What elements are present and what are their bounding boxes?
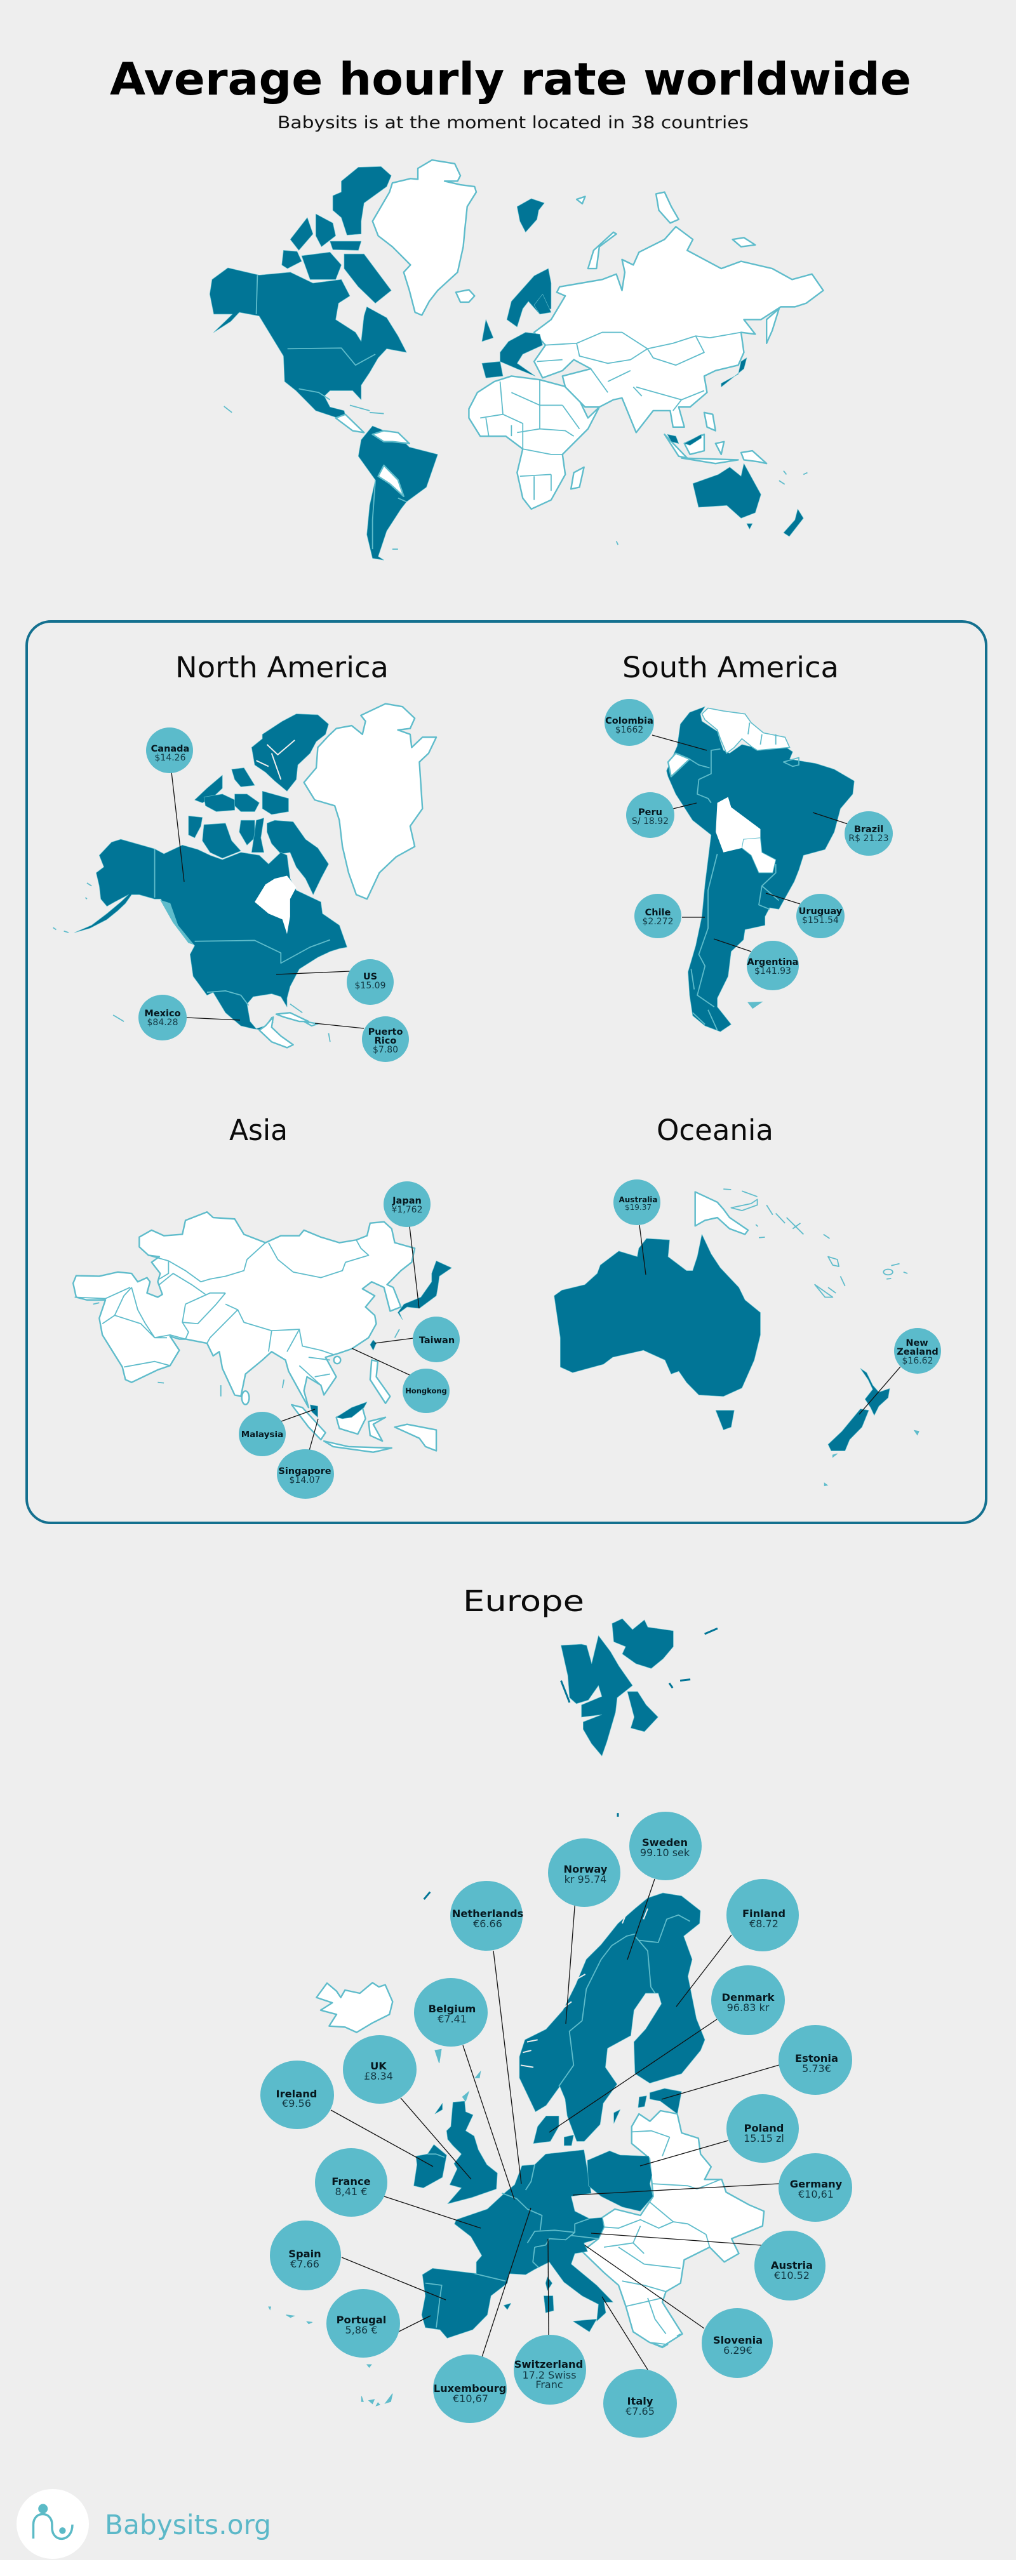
callout: Belgium: Belgium (429, 2003, 476, 2015)
callout: Brazil (813, 811, 893, 856)
map: North America (53, 704, 436, 1047)
callout: UK: £8.34 (364, 2070, 393, 2082)
callout: Puerto Rico: Puerto (368, 1027, 403, 1037)
callout: Austria (591, 2231, 826, 2300)
callout: Finland: €8.72 (749, 1918, 779, 1930)
callout: Mexico: Mexico (144, 1009, 181, 1019)
panel: Europe (260, 1584, 852, 2438)
callout: New Zealand: $16.62 (902, 1356, 933, 1366)
callout: Sweden: 99.10 sek (640, 1847, 690, 1859)
callout: Peru (626, 792, 697, 838)
callout: Austria: €10.52 (774, 2269, 810, 2281)
map: Europe north-west (316, 1982, 497, 2204)
map: South America (667, 707, 854, 1032)
callout: Hongkong: Hongkong (405, 1386, 447, 1395)
callout: Chile (634, 894, 705, 938)
panel: North America (53, 651, 436, 1062)
callout: US: US (363, 972, 377, 982)
title: Average hourly rate worldwide (110, 53, 911, 105)
heading: North America: North America (175, 651, 389, 684)
callout: Estonia: Estonia (795, 2052, 838, 2064)
footer brand name: Babysits.org (105, 2509, 271, 2541)
callout: Austria: Austria (771, 2259, 813, 2271)
callout: Germany: Germany (790, 2178, 843, 2190)
callout: Taiwan (375, 1317, 460, 1362)
footer logo (17, 2489, 89, 2559)
callout: Slovenia: Slovenia (713, 2334, 763, 2346)
logo badge (17, 2489, 89, 2559)
callout: New Zealand: Zealand (897, 1347, 939, 1357)
callout: Germany (573, 2153, 852, 2222)
callout: Puerto Rico: Rico (375, 1036, 396, 1046)
callout: US (276, 959, 394, 1005)
callout: Switzerland (514, 2239, 586, 2405)
callout: France (315, 2148, 481, 2228)
map: Asia (73, 1212, 451, 1452)
callout: Argentina: Argentina (747, 957, 798, 967)
callout: Argentina: $141.93 (754, 966, 791, 976)
callout: France: France (331, 2175, 371, 2188)
callout: Australia: Australia (618, 1195, 658, 1204)
callout: Brazil: Brazil (854, 825, 883, 835)
heading: Oceania: Oceania (657, 1113, 773, 1147)
callout: Puerto Rico: $7.80 (373, 1045, 398, 1055)
callout: Netherlands: Netherlands (452, 1908, 523, 1920)
map: Europe south and centre (269, 2111, 764, 2406)
callout: Sweden: Sweden (642, 1836, 688, 1849)
heading: Asia: Asia (229, 1113, 288, 1147)
callout: Germany: €10,61 (798, 2188, 834, 2200)
callout: Singapore (277, 1419, 334, 1499)
callout: Hongkong (352, 1348, 450, 1413)
callout: Peru: Peru (638, 807, 662, 818)
heading: South America: South America (622, 651, 839, 684)
callout: Malaysia (239, 1409, 315, 1456)
logo figure line (33, 2514, 72, 2539)
callout: UK: UK (370, 2060, 387, 2072)
callout: Poland: 15.15 zl (744, 2132, 784, 2144)
callout: Estonia (662, 2025, 852, 2099)
callout: Switzerland: Franc (535, 2379, 563, 2391)
callout: Poland: Poland (744, 2122, 784, 2134)
callout: Mexico (138, 995, 240, 1040)
callout: Norway: Norway (564, 1863, 608, 1875)
callout: Japan (384, 1181, 431, 1308)
map: Svalbard (424, 1619, 718, 1899)
callout: Canada (146, 727, 193, 882)
callout: New Zealand: New (906, 1338, 928, 1348)
callout: Spain (270, 2221, 446, 2300)
callout: Ireland (260, 2061, 433, 2167)
callout: Portugal (326, 2289, 431, 2358)
callout: Switzerland: 17.2 Swiss (522, 2369, 577, 2381)
callout: Luxembourg (433, 2208, 531, 2423)
callout: Spain: Spain (288, 2248, 321, 2260)
panel: continents frame (27, 621, 986, 1523)
callout: Italy: €7.65 (625, 2405, 655, 2417)
logo child head (59, 2527, 66, 2534)
callout: Chile: Chile (645, 908, 671, 918)
callout: Singapore: Singapore (278, 1466, 331, 1477)
callout: Canada: $14.26 (155, 753, 186, 763)
callout: Netherlands: €6.66 (473, 1918, 502, 1930)
map: Oceania (554, 1189, 919, 1486)
callout: Spain: €7.66 (290, 2258, 319, 2270)
heading: Europe: Europe (463, 1584, 584, 1618)
callout: Italy: Italy (627, 2395, 653, 2407)
callout: Uruguay (766, 893, 845, 938)
callout: Poland (640, 2094, 799, 2166)
callout: Finland: Finland (742, 1908, 785, 1920)
callout: Portugal: Portugal (337, 2314, 386, 2326)
callout: Chile: $2.272 (643, 917, 673, 927)
callout: Ireland: €9.56 (282, 2097, 311, 2109)
callout: Norway: kr 95.74 (565, 1873, 606, 1885)
callout: Argentina (714, 939, 799, 990)
callout: Norway (548, 1838, 620, 2024)
callout: Belgium: €7.41 (438, 2013, 467, 2025)
callout: Denmark (549, 1965, 785, 2132)
panel: Asia (73, 1113, 460, 1499)
callout: Australia (613, 1179, 660, 1275)
callout: Denmark: 96.83 kr (727, 2002, 770, 2014)
panel: Oceania (554, 1113, 941, 1486)
callout: Luxembourg: Luxembourg (434, 2382, 506, 2394)
callout: Australia: $19.37 (625, 1203, 652, 1212)
callout: Mexico: $84.28 (147, 1018, 178, 1028)
callout: Luxembourg: €10,67 (453, 2393, 488, 2405)
callout: Taiwan: Taiwan (419, 1336, 455, 1346)
callout: Belgium (414, 1978, 514, 2200)
callout: Colombia (605, 699, 707, 750)
callout: Colombia: Colombia (605, 716, 653, 726)
panel: South America (605, 651, 893, 1032)
callout: Puerto Rico (315, 1016, 409, 1062)
callout: Estonia: 5.73€ (802, 2062, 831, 2075)
map: Europe north-east (519, 1893, 705, 2211)
callout: Canada: Canada (151, 744, 189, 754)
callout: Uruguay: $151.54 (802, 915, 839, 926)
callout: Uruguay: Uruguay (799, 906, 843, 917)
callout: US: $15.09 (354, 981, 386, 991)
callout: Italy (602, 2297, 677, 2438)
callout: Brazil: R$ 21.23 (848, 833, 889, 844)
callout: Slovenia: 6.29€ (723, 2344, 752, 2356)
callout: Portugal: 5,86 € (345, 2324, 377, 2336)
callout: Ireland: Ireland (276, 2088, 317, 2100)
callout: New Zealand (859, 1328, 941, 1414)
callout: France: 8,41 € (335, 2186, 367, 2198)
callout: Sweden (627, 1812, 702, 1960)
callout: Colombia: $1662 (615, 725, 643, 735)
callout: Slovenia (585, 2245, 773, 2378)
callout: Malaysia: Malaysia (241, 1430, 283, 1440)
callout: Japan: ¥1,762 (391, 1205, 423, 1215)
callout: UK (343, 2035, 471, 2179)
callout: Singapore: $14.07 (290, 1475, 320, 1485)
logo adult head (38, 2504, 48, 2514)
callout: Peru: S/ 18.92 (632, 816, 669, 827)
subtitle: Babysits is at the moment located in 38 countries (277, 113, 749, 133)
world map (210, 160, 823, 560)
callout: Denmark: Denmark (722, 1991, 775, 2003)
callout: Netherlands (450, 1881, 523, 2184)
callout: Japan: Japan (392, 1196, 422, 1206)
callout: Finland (676, 1879, 799, 2007)
callout: Switzerland: Switzerland (514, 2358, 583, 2370)
